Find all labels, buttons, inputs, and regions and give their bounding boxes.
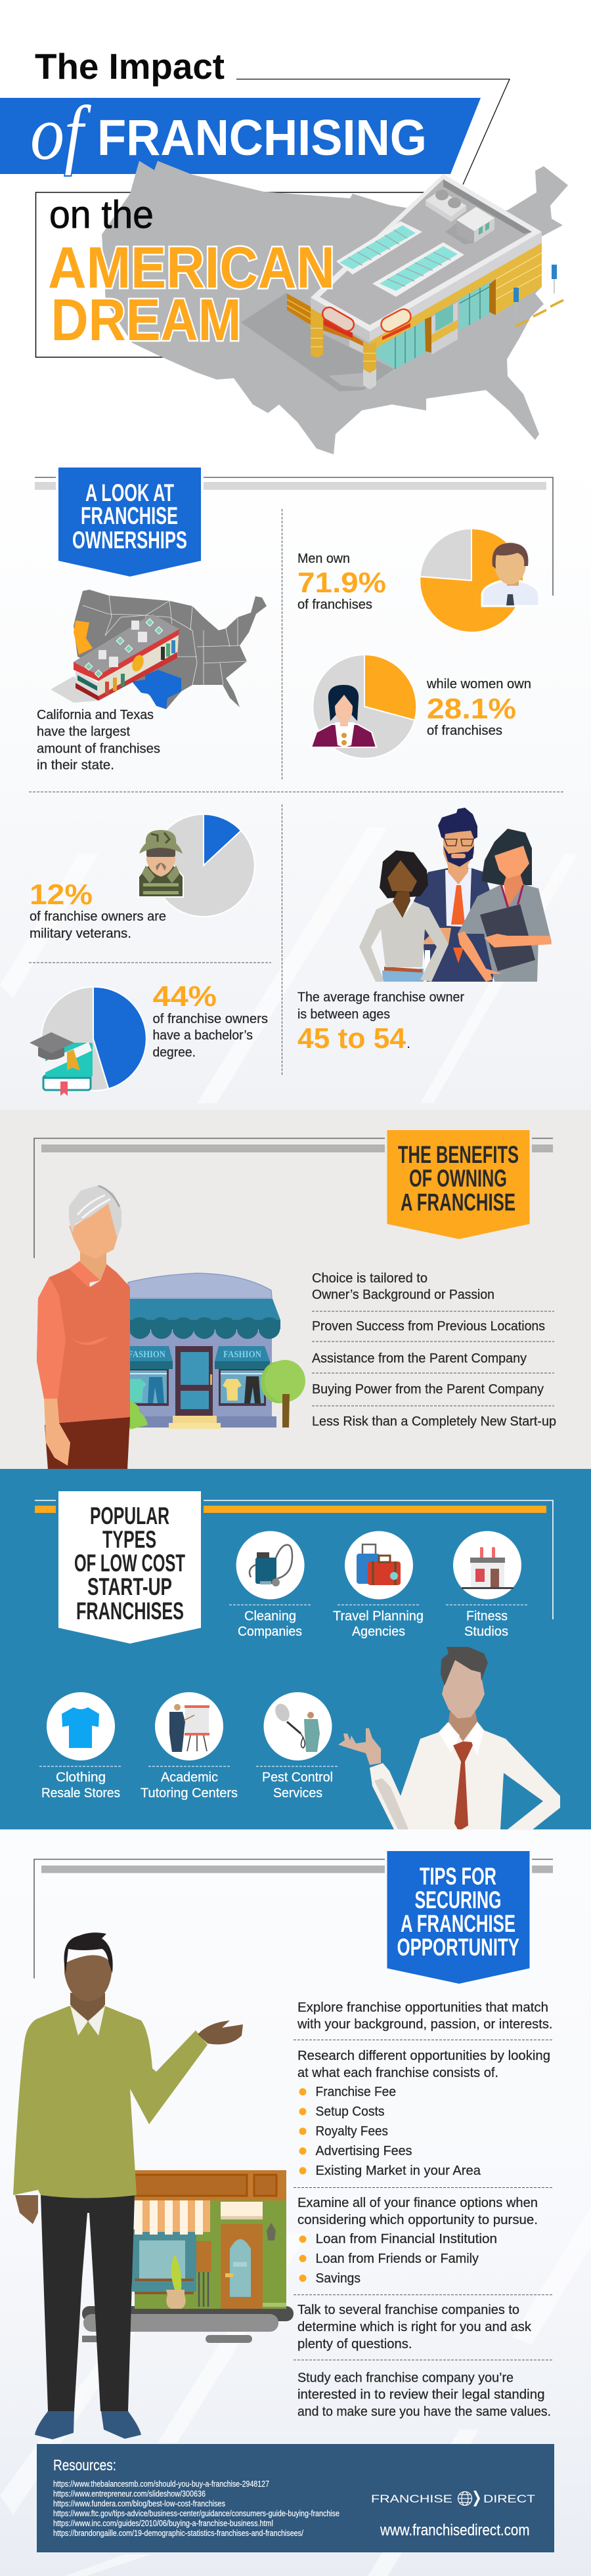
panel: popular types of low cost start-up franchises (0, 1469, 591, 1830)
resources list: https://www.ftc.gov/tips-advice/business-center/guidance/consumers-guide-buying-franchise (53, 2508, 339, 2518)
stat: average owner age 45 to 54: . (406, 1035, 410, 1051)
resources list: Resources: (53, 2456, 116, 2474)
title text: AMERICAN (48, 234, 335, 300)
panel: tips for securing a franchise opportunity (13, 1846, 554, 2439)
tips list: at what each franchise consists of. (297, 2065, 498, 2080)
panel: the benefits of owning a franchise (0, 1110, 591, 1470)
heading ribbon: OF LOW COST (74, 1550, 185, 1577)
heading ribbon: TYPES (102, 1526, 156, 1553)
footer: resources and logo (37, 2444, 554, 2552)
tips list: Study each franchise company you’re (297, 2370, 514, 2386)
stat: 12% military veterans: 12% (30, 879, 93, 911)
type: academic tutoring centers: Tutoring Centers (141, 1785, 238, 1801)
type: cleaning companies: Companies (238, 1624, 302, 1639)
text: California and Texas: have the largest (37, 724, 130, 739)
type: pest control services (256, 1692, 338, 1801)
pie chart: bachelor's degree 44% (41, 987, 146, 1091)
tips list: plenty of questions. (297, 2336, 412, 2351)
heading ribbon: OPPORTUNITY (397, 1934, 519, 1961)
pie chart: women 28.1% (313, 655, 416, 758)
icon: soldier (139, 830, 183, 897)
illustration: fashion storefront: FASHION (223, 1349, 261, 1360)
resources list: https://www.fundera.com/blog/best-low-cost-franchises (53, 2499, 225, 2508)
title text: The Impact (35, 46, 225, 87)
type: cleaning companies (229, 1531, 311, 1639)
tips list: considering which opportunity to pursue. (297, 2212, 538, 2227)
type: pest control services: Services (273, 1785, 322, 1801)
title text (30, 46, 427, 353)
benefits list: Less Risk than a Completely New Start-up (312, 1414, 556, 1429)
tips list: Loan from Friends or Family (315, 2251, 479, 2266)
map with California and Texas highlighted (51, 590, 267, 709)
illustration: group of three owners (359, 808, 552, 982)
parking signs (514, 265, 563, 326)
benefits list: Choice is tailored to (312, 1271, 427, 1286)
title text: DREAM (51, 288, 242, 353)
text: California and Texas (37, 707, 160, 773)
resources list: https://www.inc.com/guides/2010/06/buying-a-franchise-business.html (53, 2518, 273, 2528)
stat: average owner age 45 to 54: The average franchise owner (297, 990, 464, 1005)
heading ribbon: A FRANCHISE (401, 1910, 515, 1937)
stat: women own 28.1%: 28.1% (427, 693, 516, 725)
tips list: Examine all of your finance options when (297, 2195, 538, 2210)
resources list (53, 2456, 339, 2538)
type: clothing resale stores: Clothing (56, 1770, 106, 1785)
resources list: https://www.entrepreneur.com/slideshow/300636 (53, 2489, 206, 2499)
stat: 44% bachelor's degree: have a bachelor’s (152, 1028, 253, 1043)
stat: average owner age 45 to 54: 45 to 54 (297, 1022, 406, 1055)
logo: Franchise Direct: FRANCHISE (371, 2493, 452, 2505)
type: academic tutoring centers (141, 1692, 238, 1801)
stat: average owner age 45 to 54 (297, 990, 464, 1055)
benefits list: Assistance from the Parent Company (312, 1351, 527, 1366)
stat: men own 71.9%: of franchises (297, 597, 372, 612)
man in suit (414, 808, 499, 982)
stat: 12% military veterans: of franchise owners are (30, 909, 166, 924)
stat: 44% bachelor's degree (152, 980, 268, 1060)
tips list: Savings (315, 2271, 361, 2286)
tips list: Franchise Fee (315, 2084, 396, 2099)
illustration: franchise building (241, 174, 542, 391)
type: fitness studios (446, 1531, 528, 1639)
stat: men own 71.9%: 71.9% (297, 567, 386, 599)
stat: 44% bachelor's degree: degree. (152, 1045, 196, 1060)
heading ribbon: A LOOK AT (85, 479, 174, 506)
header illustration and title (0, 46, 568, 454)
website address: www.franchisedirect.com (380, 2521, 529, 2539)
type: fitness studios: Fitness (466, 1609, 508, 1623)
stat: men own 71.9%: Men own (297, 551, 350, 566)
tips list: with your background, passion, or interests. (297, 2017, 553, 2032)
heading ribbon: START-UP (87, 1573, 172, 1600)
heading ribbon: FRANCHISES (76, 1598, 184, 1625)
heading ribbon: A FRANCHISE (401, 1189, 515, 1216)
type: travel planning agencies: Travel Planning (333, 1609, 424, 1623)
benefits list: Buying Power from the Parent Company (312, 1382, 544, 1397)
tips list: Loan from Financial Institution (315, 2231, 497, 2246)
type: fitness studios: Studios (464, 1624, 508, 1639)
resources list: https://www.thebalancesmb.com/should-you-buy-a-franchise-2948127 (53, 2479, 269, 2489)
heading ribbon (387, 1130, 529, 1239)
stat: men own 71.9% (297, 551, 386, 612)
illustration: grey-haired woman (37, 1185, 130, 1470)
illustration: shop on a platform (82, 2170, 294, 2343)
stat: women own 28.1%: of franchises (427, 723, 502, 738)
heading ribbon: THE BENEFITS (398, 1141, 519, 1168)
heading ribbon (58, 1491, 201, 1644)
heading ribbon: FRANCHISE (81, 502, 178, 529)
illustration: man in white shirt gesturing (338, 1647, 560, 1830)
title band (0, 98, 481, 174)
heading ribbon: POPULAR (90, 1502, 169, 1529)
illustration: red storefront building (51, 614, 179, 703)
stat: average owner age 45 to 54: is between ages (297, 1007, 390, 1022)
resources list: https://brandongaille.com/19-demographic-statistics-franchises-and-franchisees/ (53, 2528, 303, 2538)
icon: businessman (482, 542, 539, 606)
stat: women own 28.1% (426, 676, 531, 738)
tree (261, 1360, 305, 1428)
tips list: and to make sure you have the same values. (297, 2404, 551, 2419)
tips list (294, 2000, 554, 2419)
type: clothing resale stores (39, 1692, 121, 1801)
type: travel planning agencies (333, 1531, 424, 1639)
tips list: Setup Costs (315, 2104, 385, 2119)
stat: 12% military veterans (30, 879, 166, 941)
icon: businesswoman (311, 685, 376, 747)
illustration: fashion storefront: FASHION (128, 1349, 165, 1360)
heading ribbon (387, 1851, 529, 1984)
type: pest control services: Pest Control (262, 1770, 333, 1785)
type: academic tutoring centers: Academic (161, 1770, 218, 1785)
benefits list (312, 1271, 556, 1429)
benefits list: Owner’s Background or Passion (312, 1287, 494, 1302)
heading ribbon: OWNERSHIPS (72, 527, 187, 554)
tips list: Royalty Fees (315, 2124, 388, 2139)
heading ribbon: OF OWNING (409, 1165, 507, 1192)
text: California and Texas: amount of franchises (37, 741, 160, 756)
text: California and Texas: in their state. (37, 758, 114, 773)
illustration: fashion storefront (128, 1273, 305, 1430)
tips list: Explore franchise opportunities that match (297, 2000, 548, 2015)
stat: 44% bachelor's degree: of franchise owners (152, 1011, 268, 1026)
type: clothing resale stores: Resale Stores (41, 1785, 120, 1801)
heading ribbon (58, 468, 201, 577)
tips list: Research different opportunities by looking (297, 2048, 550, 2063)
title text: FRANCHISING (97, 110, 427, 166)
tips list: interested in to review their legal standing (297, 2387, 545, 2402)
benefits list: Proven Success from Previous Locations (312, 1319, 545, 1334)
tips list: Advertising Fees (315, 2143, 412, 2158)
heading ribbon: TIPS FOR (420, 1863, 496, 1890)
title text: on the (49, 193, 154, 236)
text: California and Texas: California and Texas (37, 707, 154, 722)
type: cleaning companies: Cleaning (244, 1609, 296, 1623)
logo: Franchise Direct: DIRECT (483, 2493, 535, 2505)
stat: 44% bachelor's degree: 44% (152, 980, 217, 1013)
icon: books and graduation cap (30, 1032, 93, 1096)
tips list: Existing Market in your Area (315, 2163, 481, 2178)
title text: of (30, 90, 92, 176)
type: travel planning agencies: Agencies (352, 1624, 405, 1639)
heading ribbon: SECURING (415, 1887, 502, 1913)
panel: a look at franchise ownerships (29, 463, 563, 1096)
logo: Franchise Direct (371, 2491, 535, 2506)
map of the United States (102, 161, 568, 454)
woman in grey sweater (359, 850, 449, 982)
pie chart: men 71.9% (420, 529, 523, 632)
tips list: Talk to several franchise companies to (297, 2302, 519, 2317)
stat: 12% military veterans: military veterans. (30, 926, 131, 941)
stat: women own 28.1%: while women own (426, 676, 531, 691)
tips list: determine which is right for you and ask (297, 2319, 532, 2334)
illustration: man in green sweater (13, 1932, 243, 2439)
pie chart: veterans 12% (152, 814, 255, 917)
woman with folder (458, 829, 552, 982)
